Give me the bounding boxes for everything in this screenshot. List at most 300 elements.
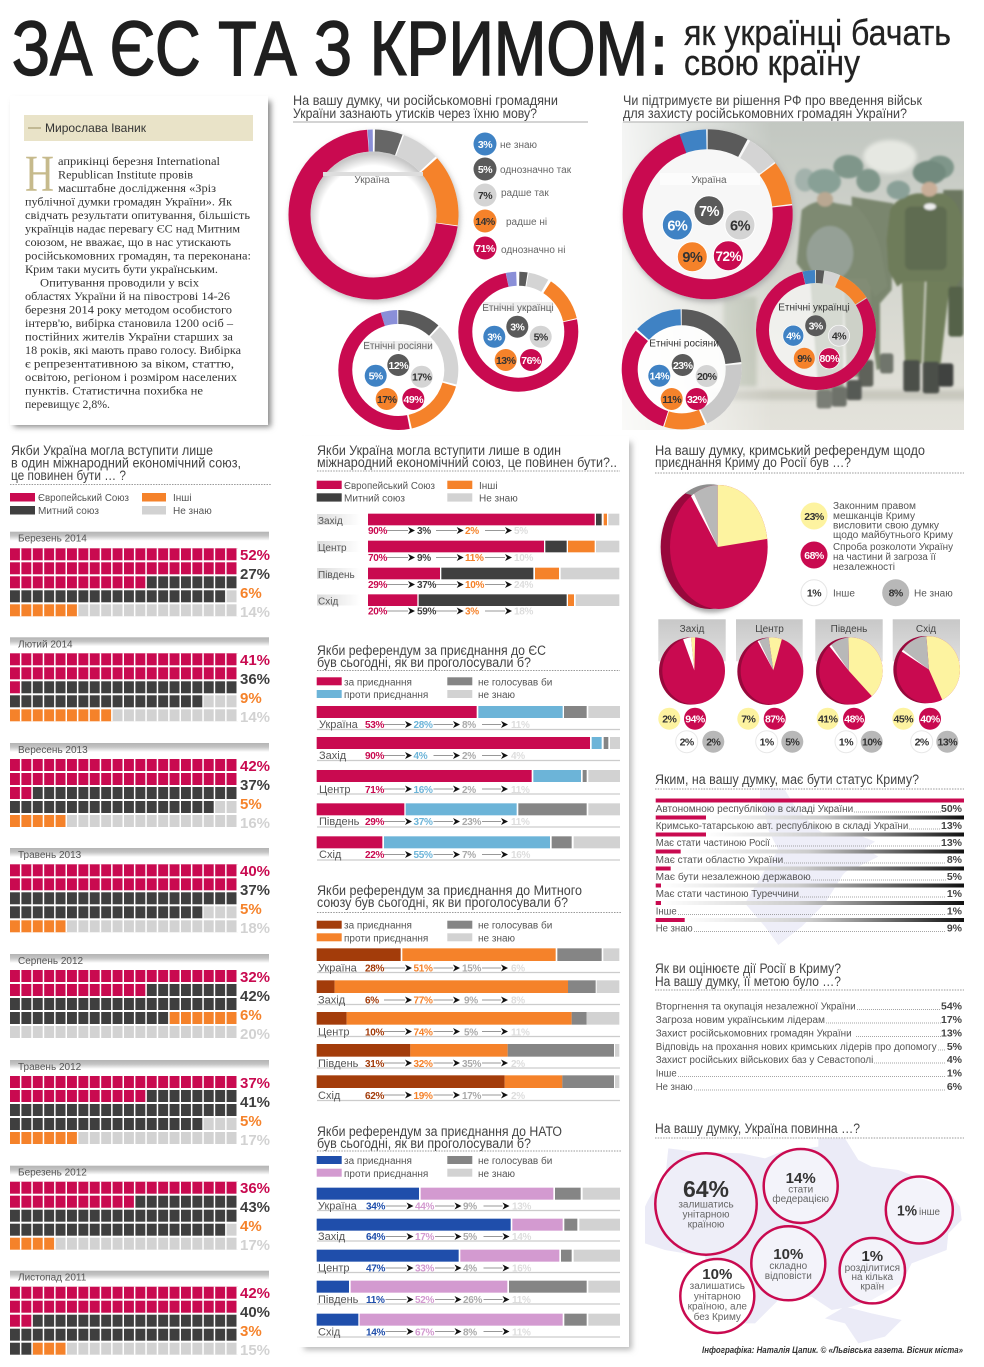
article text: інтерв'ю, вибірка становила 1200 осіб – xyxy=(25,316,234,330)
waffle: November 2011: Листопад 2011 xyxy=(18,1273,87,1284)
heading: Russia's actions xyxy=(655,961,964,990)
article text: Опитування проводили у всіх xyxy=(40,276,199,290)
legend: economic union timeline: Митний союз xyxy=(38,506,99,517)
legend: NATO referendum: не голосував би xyxy=(478,1155,552,1167)
bar row: Центр NATO: 47% xyxy=(366,1264,386,1274)
waffle: February 2014: 9% xyxy=(240,690,262,707)
legend: Crimean referendum overall: 8% xyxy=(889,588,904,600)
article text: свідчать результати опитування, більшість xyxy=(25,208,251,222)
heading: troops question: для захисту російськомовних громадян України? xyxy=(623,106,907,121)
heading: EU referendum: був сьогодні, як ви проголосували б? xyxy=(317,655,531,670)
callout: 1% other: інше xyxy=(919,1207,940,1218)
waffle: May 2013: 18% xyxy=(240,920,270,937)
list: Crimea status: 13% xyxy=(941,820,963,832)
pie: Crimean referendum overall xyxy=(659,484,768,616)
callout: 10% hard to answer: відповісти xyxy=(765,1271,812,1282)
bar row: Центр EU: 11% xyxy=(511,785,530,796)
waffle: March 2014: Березень 2014 xyxy=(18,534,87,545)
bar row: Захід NATO: Захід xyxy=(318,1231,346,1243)
article text: союзом, не вважає, що в нас утискають xyxy=(25,235,232,249)
bar row: Південь union: 37% xyxy=(417,580,437,591)
donut: ethnic Ukrainians language: Етнічні українці xyxy=(482,303,554,314)
bar row: Схід Customs: 62% xyxy=(365,1091,385,1102)
waffle: February 2014: 14% xyxy=(240,709,270,726)
donut: Ukraine troops: 9% xyxy=(682,250,703,266)
bar row: Центр Customs xyxy=(317,1012,620,1038)
legend: language pressure xyxy=(474,132,572,260)
callout: 10% hard to answer: складно xyxy=(769,1261,808,1272)
waffle: November 2011: 15% xyxy=(240,1342,270,1359)
bar row: Захід NATO xyxy=(317,1219,620,1243)
donut: ethnic Ukrainians troops: 4% xyxy=(832,330,847,342)
donut: ethnic Ukrainians language: 5% xyxy=(534,332,549,344)
bar row: Україна EU: 8% xyxy=(462,720,476,731)
legend: language pressure: 7% xyxy=(478,190,493,202)
bar row: Південь union xyxy=(317,568,619,591)
heading: troops question: Чи підтримуєте ви рішення РФ про введення військ xyxy=(623,93,922,108)
bar row: Захід EU: 2% xyxy=(462,751,476,762)
legend: Crimean referendum overall: Інше xyxy=(833,589,855,600)
waffle: May 2012: 41% xyxy=(240,1094,270,1111)
callout: 1% other: 1% xyxy=(897,1202,917,1220)
legend: economic union timeline: Інші xyxy=(173,493,192,504)
callout: 10% without Crimea: 10% xyxy=(702,1266,732,1283)
donut: ethnic Russians troops: 32% xyxy=(687,394,708,406)
legend: language pressure: однозначно ні xyxy=(501,245,565,256)
heading: NATO referendum: Якби референдум за приєднання до НАТО xyxy=(317,1124,562,1139)
heading: Russia's actions: На вашу думку, її метою було …? xyxy=(655,974,841,989)
callout: 10% without Crimea xyxy=(680,1259,754,1333)
waffle: March 2014: 27% xyxy=(240,566,270,583)
waffle: August 2012: 20% xyxy=(240,1026,270,1043)
bar row: Схід union: 20% xyxy=(368,607,388,618)
bar row: Захід NATO: 64% xyxy=(366,1232,386,1243)
callout: 14%: федерацією xyxy=(772,1193,830,1205)
article text: областях України й на півострові 14-26 xyxy=(25,289,230,303)
waffle: May 2013: Травень 2013 xyxy=(18,850,82,861)
panel: regional bars xyxy=(296,436,632,1350)
bar row: Захід union: Захід xyxy=(318,516,343,527)
heading: Customs Union referendum: Якби референдум за приєднання до Митного xyxy=(317,883,582,898)
heading: russian-speakers pressure: України зазнають утисків через їхню мову? xyxy=(293,106,537,121)
waffle: May 2012 xyxy=(10,1060,270,1149)
bar row: Схід NATO xyxy=(317,1314,620,1338)
bar row: Південь NATO: 11% xyxy=(512,1295,531,1306)
bar row: Схід NATO: 14% xyxy=(366,1328,386,1338)
list: Crimea status: 1% xyxy=(947,888,963,900)
bar row: Центр union: 11% xyxy=(465,553,484,564)
waffle: March 2012: Березень 2012 xyxy=(18,1168,87,1179)
waffle: August 2012 xyxy=(10,954,270,1043)
author band xyxy=(24,115,253,141)
legend: language pressure: 3% xyxy=(478,139,493,151)
donut: ethnic Ukrainians language: 76% xyxy=(521,355,542,367)
regional pie: Центр: Центр xyxy=(755,624,784,635)
legend: economic union timeline: Європейський Союз xyxy=(38,493,129,504)
bar row: Захід EU xyxy=(317,737,620,762)
bar row: Україна EU xyxy=(317,706,620,731)
callout: 1% other xyxy=(886,1176,953,1244)
list: Crimea status: Має стати частиною Росії xyxy=(656,838,770,849)
bar row: Південь Customs: Південь xyxy=(318,1058,359,1070)
donut: ethnic Russians language: 12% xyxy=(389,360,409,372)
bar row: Україна EU: 28% xyxy=(414,720,433,731)
bar row: Україна Customs: 15% xyxy=(462,964,482,974)
heading: Crimean referendum: приєднання Криму до Росії був …? xyxy=(655,455,851,470)
donut: Ukraine language pressure xyxy=(269,110,478,319)
bar row: Південь NATO: 52% xyxy=(415,1295,435,1306)
list: Russia's actions: 13% xyxy=(941,1028,963,1040)
legend: Crimean referendum overall xyxy=(800,501,953,606)
donut: ethnic Ukrainians troops: 9% xyxy=(797,353,813,365)
bar row: Південь EU: Південь xyxy=(319,816,360,828)
bar row: Схід EU: 55% xyxy=(414,850,433,861)
callout: 1% split: країн xyxy=(860,1282,884,1292)
list: Russia's actions: Загроза новим українським лідерам xyxy=(656,1015,825,1026)
bar row: Схід EU: 7% xyxy=(462,850,476,861)
donut: ethnic Ukrainians troops xyxy=(742,256,890,404)
waffle: March 2014 xyxy=(10,532,270,621)
heading: economic union timeline: в один міжнародний економічний союз, xyxy=(11,456,241,470)
regional pie: Схід xyxy=(890,619,965,753)
list: Crimea status: 50% xyxy=(941,803,963,815)
bar row: Центр Customs: 5% xyxy=(464,1028,478,1038)
list: Crimea status: Має стати частиною Туреччини xyxy=(656,889,799,900)
waffle: March 2012 xyxy=(10,1166,270,1254)
donut: ethnic Ukrainians troops: 80% xyxy=(820,353,840,365)
waffle: March 2012: 36% xyxy=(240,1180,270,1197)
bar row: Центр union: Центр xyxy=(318,543,347,554)
legend: economic union timeline xyxy=(10,493,212,517)
heading: Crimean referendum xyxy=(655,443,964,473)
regional pie: Захід: 2% xyxy=(680,736,695,748)
callout: 14% xyxy=(764,1149,838,1223)
list: Crimea status: Не знаю xyxy=(656,924,693,934)
bar row: Захід Customs: 8% xyxy=(511,996,525,1006)
bar row: Схід Customs xyxy=(317,1075,620,1102)
heading: economic union timeline: Якби Україна могла вступити лише xyxy=(11,443,213,458)
heading: EU referendum xyxy=(317,643,620,670)
bar row: Україна NATO: 9% xyxy=(463,1202,477,1212)
legend: Customs Union referendum: проти приєднання xyxy=(344,934,428,944)
list: Crimea status: 8% xyxy=(947,854,963,866)
regional pie: Центр: 7% xyxy=(741,714,757,726)
donut: ethnic Ukrainians language xyxy=(445,258,592,405)
waffle: September 2013: Вересень 2013 xyxy=(18,745,88,756)
list: Russia's actions: 4% xyxy=(947,1054,963,1066)
legend: language pressure: 14% xyxy=(475,216,496,228)
bar row: Україна EU: Україна xyxy=(319,719,359,731)
regional pie: Центр: 5% xyxy=(785,736,801,748)
article text: перевищує 2,8%. xyxy=(25,397,110,411)
bar row: Центр NATO: 16% xyxy=(512,1264,532,1274)
list: Russia's actions: Вторгнення та окупація незалежної України xyxy=(656,1002,856,1012)
bar row: Південь NATO: 26% xyxy=(463,1295,483,1306)
waffle: September 2013: 42% xyxy=(240,758,270,775)
donut: ethnic Ukrainians language: 3% xyxy=(510,322,526,334)
callout: 14%: стати xyxy=(788,1184,813,1196)
list: Crimea status: Має стати областю України xyxy=(656,854,783,866)
article text: масштабне дослідження «Зріз xyxy=(58,181,216,195)
donut: Ukraine language pressure: Україна xyxy=(354,175,390,186)
list: Russia's actions: 1% xyxy=(947,1068,963,1080)
bar row: Південь EU: 37% xyxy=(414,817,433,828)
regional pie: Південь: Південь xyxy=(831,624,867,635)
bar row: Захід Customs: Захід xyxy=(318,994,346,1006)
legend: Crimean referendum overall: незалежності xyxy=(833,562,895,573)
list: Russia's actions: 5% xyxy=(947,1041,963,1053)
bar row: Південь EU xyxy=(317,803,620,828)
article text: априкінці березня International xyxy=(58,154,221,168)
callout: 64% xyxy=(655,1153,757,1255)
bar row: Центр NATO: 4% xyxy=(463,1264,477,1274)
article text: російськомовних громадян, та переконана: xyxy=(25,248,251,262)
donut: ethnic Ukrainians language: 3% xyxy=(487,332,503,344)
title: ЗА ЄС ТА З КРИМОМ xyxy=(12,6,648,92)
heading: economic union timeline xyxy=(10,443,271,484)
donut: ethnic Russians troops xyxy=(608,296,755,443)
waffle: September 2013 xyxy=(10,743,270,832)
heading: Customs Union referendum xyxy=(317,883,621,912)
heading: NATO referendum: був сьогодні, як ви проголосували б? xyxy=(317,1136,531,1151)
bar row: Захід Customs: 6% xyxy=(365,996,379,1006)
bar row: Схід NATO: Схід xyxy=(318,1326,341,1338)
bar row: Південь EU: 29% xyxy=(365,817,385,828)
bar row: Схід Customs: Схід xyxy=(318,1090,341,1102)
donut: ethnic Russians language: 49% xyxy=(404,394,424,406)
list: Russia's actions: Інше xyxy=(656,1068,677,1080)
bar row: Центр union: 9% xyxy=(417,553,431,564)
legend: language pressure: не знаю xyxy=(500,140,538,151)
bar row: Схід union: 18% xyxy=(514,607,534,618)
callout: 10% without Crimea: залишатись xyxy=(690,1281,745,1292)
legend: Crimean referendum overall: 23% xyxy=(804,511,825,523)
callout: 1% split xyxy=(840,1238,905,1303)
waffle: May 2013 xyxy=(10,848,270,937)
bar row: Схід union: Схід xyxy=(318,596,338,608)
legend: language pressure: радше ні xyxy=(506,217,547,228)
donut: ethnic Russians language: 5% xyxy=(369,370,384,382)
donut: Ukraine troops: Україна xyxy=(691,175,727,186)
photo: soldiers xyxy=(610,120,970,435)
callout: 10% hard to answer: 10% xyxy=(773,1246,803,1263)
donut: Ukraine troops xyxy=(603,109,813,319)
regional pie: Центр: 1% xyxy=(760,736,775,748)
bar row: Центр union: 10% xyxy=(514,553,534,564)
legend: economic union timeline: Не знаю xyxy=(173,506,212,517)
bar row: Україна Customs: Україна xyxy=(318,962,358,974)
list: Crimea status: Автономною республікою в складі України xyxy=(656,803,853,815)
waffle: November 2011 xyxy=(10,1271,270,1359)
donut: ethnic Russians troops: 23% xyxy=(673,360,694,372)
bar row: Центр Customs: 11% xyxy=(511,1028,530,1038)
bar row: Схід NATO: 8% xyxy=(463,1328,477,1338)
legend: NATO referendum: проти приєднання xyxy=(344,1169,428,1180)
list: Russia's actions: Захист російськомовних громадян України xyxy=(656,1028,852,1040)
legend: Crimean referendum overall: Не знаю xyxy=(914,589,953,600)
bar row: Південь union: Південь xyxy=(318,570,355,581)
regional pie: Захід: Захід xyxy=(680,624,704,635)
bar row: Центр Customs: 10% xyxy=(365,1028,385,1038)
legend: economic union by region: Митний союз xyxy=(344,494,405,504)
donut: ethnic Russians troops: 11% xyxy=(662,394,682,406)
waffle: March 2014: 52% xyxy=(240,547,270,564)
regional pie: Південь: 48% xyxy=(844,714,865,726)
bar row: Захід Customs: 77% xyxy=(414,996,433,1006)
heading: economic union by region: Якби Україна могла вступити лише в один xyxy=(317,443,561,458)
heading: russian-speakers pressure: На вашу думку, чи російськомовні громадяни xyxy=(293,93,558,108)
legend: Crimean referendum overall: висловити свою думку xyxy=(833,520,939,532)
bar row: Україна NATO: 34% xyxy=(366,1202,386,1212)
donut: ethnic Russians troops: 14% xyxy=(650,370,670,382)
donut: Ukraine troops: 72% xyxy=(716,249,742,264)
article text: постійних жителів України старших за xyxy=(25,330,234,344)
waffle: February 2014: 41% xyxy=(240,652,270,669)
legend: NATO referendum xyxy=(317,1155,552,1180)
map: Ukraine xyxy=(645,1138,962,1343)
list: Crimea status: Кримсько-татарською авт. республікою в складі України xyxy=(656,820,908,832)
article text: 18 років, які мають право голосу. Вибірка xyxy=(25,343,242,357)
bar row: Схід EU xyxy=(317,836,620,861)
list: Russia's actions: Захист російських військових баз у Севастополі xyxy=(656,1054,873,1066)
bar row: Центр union xyxy=(317,541,619,564)
bar row: Центр EU: Центр xyxy=(319,784,350,796)
list: Crimea status xyxy=(656,798,964,934)
bar row: Захід EU: 4% xyxy=(414,751,428,762)
regional pie: Захід xyxy=(658,619,728,753)
regional pie: Південь xyxy=(815,619,883,754)
list: Crimea status: Має бути незалежною державою xyxy=(656,871,811,883)
donut: ethnic Russians language: 17% xyxy=(412,372,433,384)
waffle: May 2013: 5% xyxy=(240,901,262,918)
article text xyxy=(25,154,251,411)
waffle: September 2013: 5% xyxy=(240,796,262,813)
waffle: November 2011: 40% xyxy=(240,1304,270,1321)
bar row: Центр NATO: 33% xyxy=(415,1264,435,1274)
legend: Crimean referendum overall: 68% xyxy=(804,550,825,562)
regional pie: Центр: 87% xyxy=(765,714,786,726)
heading: economic union timeline: це повинен бути … ? xyxy=(11,468,126,483)
donut: ethnic Russians troops: 20% xyxy=(697,371,718,383)
list: Crimea status: 13% xyxy=(941,837,963,849)
waffle: March 2012: 43% xyxy=(240,1199,270,1216)
bar row: Захід union: 2% xyxy=(465,526,479,537)
list: Russia's actions: Відповідь на прохання нових кримських лідерів про допомогу xyxy=(656,1042,937,1053)
map: Crimea xyxy=(745,788,878,945)
bar row: Схід NATO: 11% xyxy=(512,1328,531,1338)
bar row: Центр NATO: Центр xyxy=(318,1262,350,1274)
regional pie: Центр xyxy=(736,619,807,753)
bar row: Захід EU: Захід xyxy=(319,750,347,762)
waffle: May 2012: Травень 2012 xyxy=(18,1062,82,1073)
legend: Customs Union referendum: не голосував би xyxy=(478,920,552,932)
panel: intro article xyxy=(10,96,271,427)
article text: українців надає перевагу ЄС над Митним xyxy=(25,222,240,236)
regional pie: Захід: 94% xyxy=(685,714,706,726)
waffle: August 2012: 42% xyxy=(240,988,270,1005)
legend: economic union by region: Європейський Союз xyxy=(344,481,435,492)
bar row: Схід NATO: 67% xyxy=(415,1328,435,1338)
bar row: Центр union: 70% xyxy=(368,553,388,564)
legend: Crimean referendum overall: мешканців Криму xyxy=(833,511,915,522)
donut: ethnic Russians language xyxy=(323,295,473,445)
callout: 64%: країною xyxy=(688,1220,725,1230)
bar row: Схід Customs: 2% xyxy=(511,1091,525,1102)
bar row: Південь Customs: 32% xyxy=(414,1059,433,1070)
donut: Ukraine troops: 6% xyxy=(667,218,688,234)
waffle: November 2011: 42% xyxy=(240,1285,270,1302)
drop cap: Н xyxy=(25,146,54,203)
bar row: Україна NATO: Україна xyxy=(318,1200,358,1212)
bar row: Захід EU: 4% xyxy=(511,751,525,762)
heading: Crimean referendum: На вашу думку, кримський референдум щодо xyxy=(655,443,925,458)
regional pie: Схід: 2% xyxy=(915,736,930,748)
list: Russia's actions: 17% xyxy=(941,1014,963,1026)
waffle: May 2013: 37% xyxy=(240,882,270,899)
waffle: March 2014: 6% xyxy=(240,585,262,602)
bar row: Захід Customs xyxy=(317,980,620,1006)
bar row: Захід union: 5% xyxy=(514,526,528,537)
legend: Crimean referendum overall: Законним правом xyxy=(833,501,916,512)
donut: ethnic Russians language: Етнічні росіяни xyxy=(363,341,433,352)
legend: Crimean referendum overall: щодо майбутнього Криму xyxy=(833,529,953,541)
bar row: Україна Customs: 28% xyxy=(365,964,385,974)
article text: публічної думки громадян України». Як xyxy=(25,194,232,208)
bar row: Південь Customs: 35% xyxy=(462,1059,482,1070)
bar row: Центр EU xyxy=(317,770,620,796)
waffle: November 2011: 3% xyxy=(240,1323,262,1340)
bar row: Схід Customs: 19% xyxy=(414,1091,433,1102)
article text: освітою, регіоном і розміром населених xyxy=(25,370,237,384)
waffle: September 2013: 37% xyxy=(240,777,270,794)
waffle: March 2012: 17% xyxy=(240,1237,270,1254)
bar row: Захід NATO: 17% xyxy=(415,1232,435,1243)
bar row: Південь union: 10% xyxy=(465,580,485,591)
bar row: Захід Customs: 9% xyxy=(464,996,478,1006)
article text: Republican Institute провів xyxy=(58,168,193,182)
legend: language pressure: 71% xyxy=(475,243,496,255)
heading: economic union by region xyxy=(317,443,620,471)
donut: ethnic Ukrainians language: 13% xyxy=(496,355,517,367)
legend: Crimean referendum overall: Спроба розколоти Україну xyxy=(833,541,953,553)
waffle: September 2013: 16% xyxy=(240,815,270,832)
callout: 14%: 14% xyxy=(786,1170,816,1187)
list: Russia's actions xyxy=(656,1000,963,1093)
bar row: Південь Customs: 2% xyxy=(511,1059,525,1070)
bar row: Захід NATO: 5% xyxy=(463,1232,477,1243)
legend: Customs Union referendum: за приєднання xyxy=(344,920,412,932)
bar row: Центр EU: 2% xyxy=(462,785,476,796)
bar row: Схід union: 3% xyxy=(465,607,479,618)
bar row: Схід EU: 16% xyxy=(511,850,531,861)
bar row: Україна NATO: 44% xyxy=(415,1202,435,1212)
bar row: Схід Customs: 17% xyxy=(462,1091,482,1102)
list: Russia's actions: 6% xyxy=(947,1081,963,1093)
bar row: Південь NATO: Південь xyxy=(318,1294,359,1306)
waffle: February 2014: 36% xyxy=(240,671,270,688)
bar row: Центр NATO xyxy=(317,1250,620,1274)
legend: NATO referendum: не знаю xyxy=(478,1169,516,1180)
waffle: May 2012: 5% xyxy=(240,1113,262,1130)
donut: Ukraine troops: 7% xyxy=(699,204,720,220)
legend: EU referendum xyxy=(317,676,552,701)
regional pie: Південь: 41% xyxy=(818,714,839,726)
list: Russia's actions: 54% xyxy=(941,1000,963,1012)
list: Crimea status: Інше xyxy=(656,906,677,918)
callout: 10% without Crimea: унітарною xyxy=(694,1292,741,1302)
bar row: Центр EU: 71% xyxy=(365,785,385,796)
donut: ethnic Ukrainians troops: 3% xyxy=(809,320,824,332)
